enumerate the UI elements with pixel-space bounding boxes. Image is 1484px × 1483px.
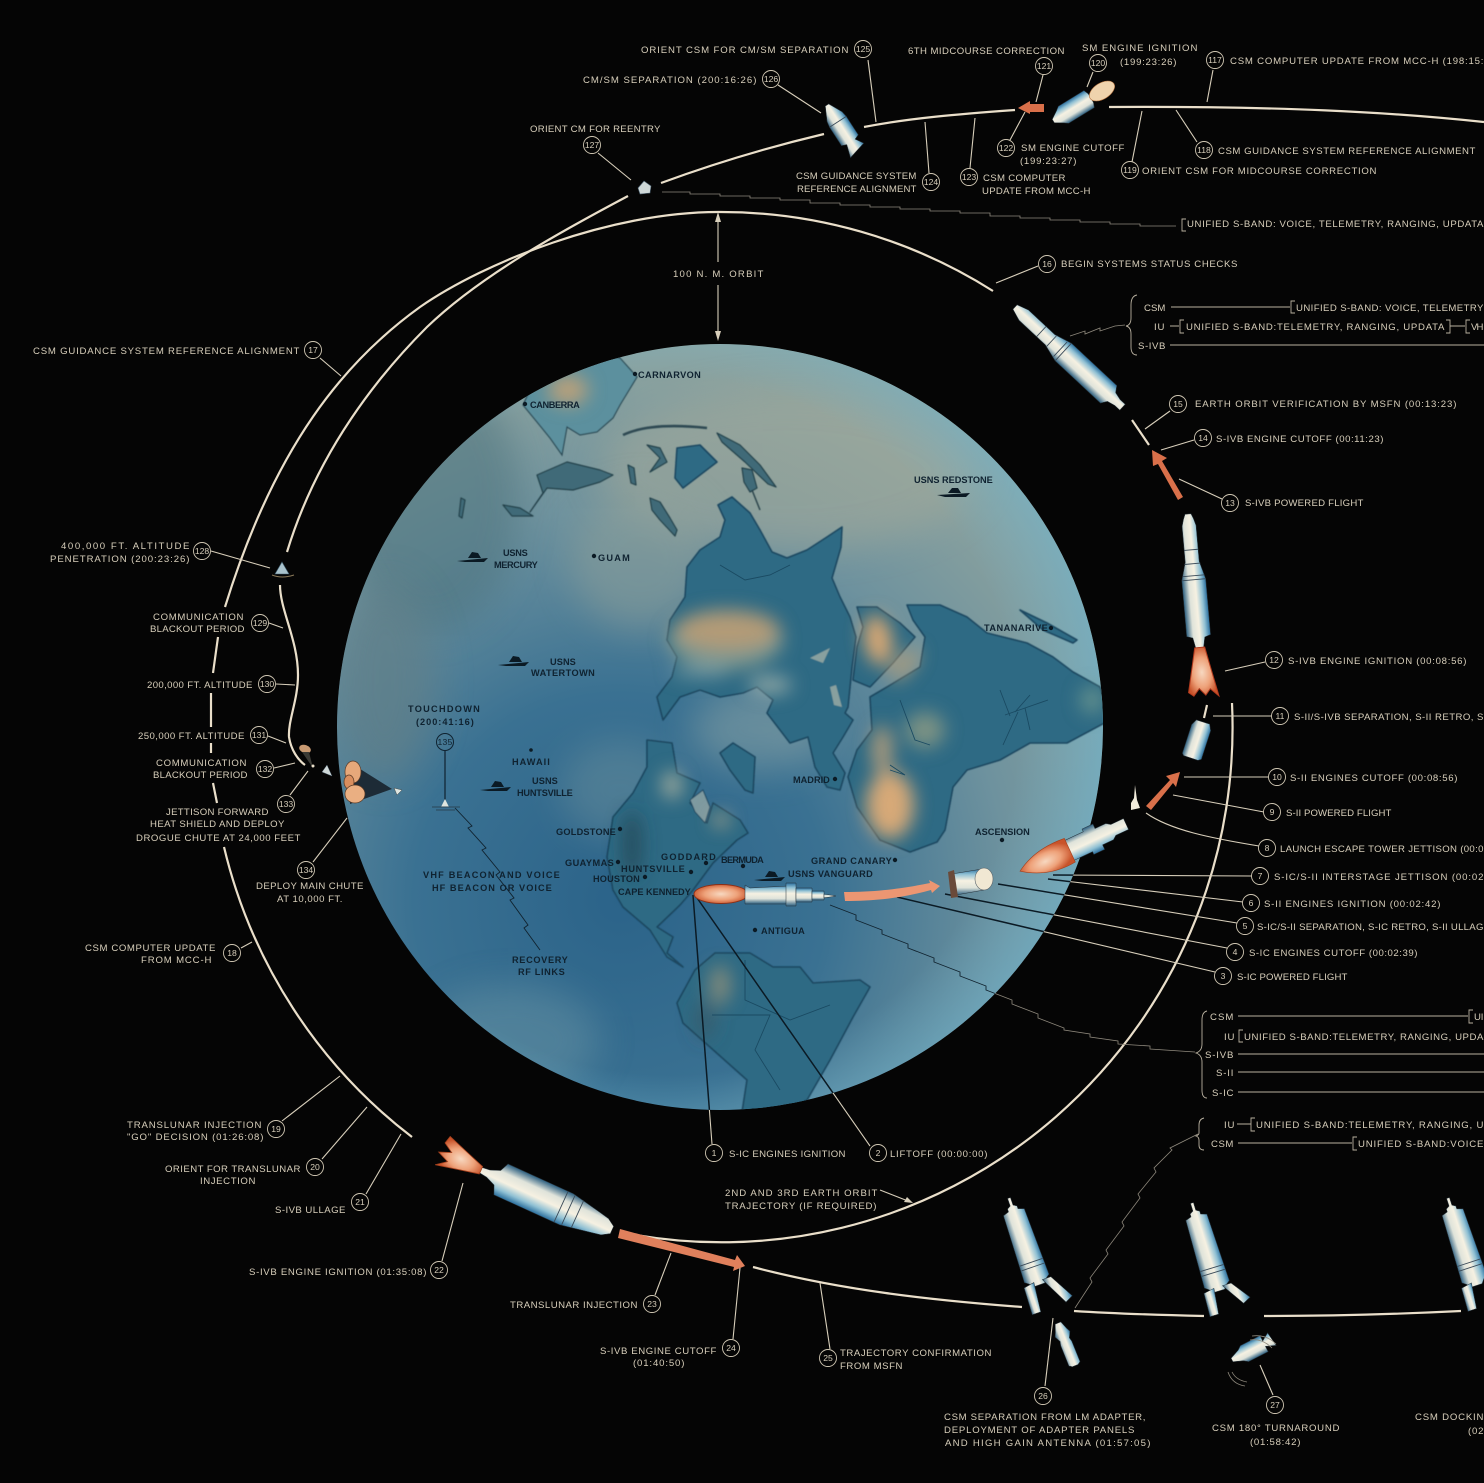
- callout 124: REFERENCE ALIGNMENT: [797, 184, 917, 195]
- terrain tinting: [548, 375, 1104, 1040]
- callout 121: [908, 46, 1065, 102]
- callout 18: FROM MCC-H: [141, 955, 212, 966]
- rocket: Saturn V at liftoff with S-IC flame: [694, 883, 836, 906]
- callout 124: CSM GUIDANCE SYSTEM: [796, 171, 917, 182]
- communication zigzag: launch to S-band (outside earth): [830, 905, 1195, 1052]
- tracking ship: USNS Mercury: [457, 548, 538, 570]
- callout 129: BLACKOUT PERIOD: [150, 624, 245, 635]
- tracking ship: USNS Vanguard: USNS VANGUARD: [788, 869, 873, 879]
- drogue chute and forward heat shield: [298, 743, 332, 776]
- callout 131: [138, 726, 286, 744]
- callout 17: [33, 342, 341, 376]
- callout 10: S-II ENGINES CUTOFF (00:08:56): [1290, 773, 1458, 784]
- callout 132: [153, 758, 295, 781]
- arrow: translunar injection: [618, 1229, 745, 1271]
- earth station labels: GUAYMAS: [565, 858, 614, 868]
- callout 130: 130: [260, 679, 274, 689]
- callout 129: [150, 612, 283, 635]
- callout 11: [1213, 708, 1484, 724]
- rocket: translunar injection S-IVB with flame: [432, 1135, 619, 1245]
- callout 26: 26: [1038, 1391, 1048, 1401]
- arrow: S-IC powered flight: [844, 880, 940, 901]
- communication panel: launch S-band links: CSM: [1210, 1012, 1234, 1023]
- callout 118: CSM GUIDANCE SYSTEM REFERENCE ALIGNMENT: [1218, 146, 1476, 157]
- spacecraft: service module engine burn: [1048, 77, 1118, 130]
- callout 4: S-IC ENGINES CUTOFF (00:02:39): [1249, 948, 1418, 959]
- callout 10: 10: [1272, 772, 1282, 782]
- callout 23: [510, 1253, 671, 1312]
- continent: Africa: [848, 605, 1110, 852]
- callout 26: CSM SEPARATION FROM LM ADAPTER,: [944, 1412, 1146, 1423]
- communication panel: CSM, IU, S-IVB links in earth orbit: [1070, 295, 1484, 355]
- communication panel: translunar S-band links: UNIFIED S-BAND:VOICE: [1358, 1139, 1484, 1150]
- callout 120: (199:23:26): [1120, 57, 1177, 68]
- callout 121: 6TH MIDCOURSE CORRECTION: [908, 46, 1065, 57]
- callout 125: 125: [856, 44, 870, 54]
- tracking ship: USNS Huntsville: USNS: [532, 776, 558, 786]
- arrow: S-IVB powered flight: [1152, 450, 1183, 500]
- callout 14: 14: [1198, 433, 1208, 443]
- callout 135: touchdown: [408, 704, 480, 810]
- rocket: S-II engines ignition, tilted stack: [1015, 811, 1132, 886]
- callout 3: 3: [1221, 971, 1226, 981]
- earth globe: [335, 344, 1110, 1125]
- communication panel: translunar S-band links: [1196, 1118, 1484, 1150]
- communication panel: launch S-band links: [1196, 1010, 1484, 1099]
- callout 21: 21: [355, 1197, 365, 1207]
- recovery RF links: RF LINKS: [518, 967, 565, 977]
- earth station labels: GOLDSTONE: [556, 827, 616, 837]
- callout 127: [530, 124, 661, 180]
- callout 21: S-IVB ULLAGE: [275, 1205, 346, 1216]
- callout: 2nd and 3rd earth orbit trajectory: 2ND AND 3RD EARTH ORBIT: [725, 1188, 878, 1199]
- callout 7: 7: [1258, 871, 1263, 881]
- callout 2: [695, 895, 988, 1162]
- callout 24: [600, 1268, 740, 1369]
- main parachutes with command module: [344, 761, 402, 804]
- callout 13: S-IVB POWERED FLIGHT: [1245, 498, 1364, 509]
- earth station labels: ANTIGUA: [761, 926, 805, 936]
- callout 17: CSM GUIDANCE SYSTEM REFERENCE ALIGNMENT: [33, 346, 300, 357]
- callout 122: [998, 112, 1125, 167]
- callout: 2nd and 3rd earth orbit trajectory: [725, 1188, 913, 1212]
- earth station labels: HUNTSVILLE: [621, 864, 685, 874]
- callout 118: 118: [1197, 145, 1211, 155]
- callout 124: 124: [924, 177, 938, 187]
- callout 9: S-II POWERED FLIGHT: [1286, 808, 1392, 819]
- callout: CSM docking: CSM DOCKIN: [1415, 1412, 1484, 1423]
- callout 6: S-II ENGINES IGNITION (00:02:42): [1264, 899, 1441, 910]
- continent: South America: [677, 953, 870, 1125]
- callout 7: S-IC/S-II INTERSTAGE JETTISON (00:02: [1274, 872, 1484, 883]
- tracking ship: USNS Watertown: USNS: [550, 657, 576, 667]
- callout 135: touchdown: 135: [438, 737, 452, 747]
- callout: CSM docking: [1415, 1412, 1484, 1437]
- callout 130: [147, 676, 295, 692]
- rivers: [712, 565, 1048, 1090]
- tracking ship: USNS Redstone: USNS REDSTONE: [914, 475, 993, 485]
- callout 20: 20: [310, 1162, 320, 1172]
- callout 133: DROGUE CHUTE AT 24,000 FEET: [136, 833, 301, 844]
- rocket: S-IVB powered, vertical with flame: [1173, 513, 1219, 699]
- callout 134: DEPLOY MAIN CHUTE: [256, 881, 364, 892]
- callout 5: S-IC/S-II SEPARATION, S-IC RETRO, S-II ULLAG: [1257, 922, 1484, 933]
- callout 119: ORIENT CSM FOR MIDCOURSE CORRECTION: [1142, 166, 1377, 177]
- communication panel: CSM, IU, S-IVB links in earth orbit: S-IVB: [1138, 341, 1166, 352]
- callout 11: S-II/S-IVB SEPARATION, S-II RETRO, S: [1294, 712, 1484, 723]
- return trajectory from moon and reentry: [280, 107, 1484, 765]
- callout 123: CSM COMPUTER: [983, 173, 1066, 184]
- callout 4: 4: [1233, 947, 1238, 957]
- callout 1: [693, 895, 846, 1162]
- callout 117: 117: [1208, 55, 1222, 65]
- callout 126: CM/SM SEPARATION (200:16:26): [583, 75, 757, 86]
- callout 133: HEAT SHIELD AND DEPLOY: [150, 819, 285, 830]
- callout 127: ORIENT CM FOR REENTRY: [530, 124, 661, 135]
- tracking ship: USNS Mercury: MERCURY: [494, 560, 538, 570]
- white dash: earth orbit insertion: [1132, 420, 1149, 445]
- callout 21: [275, 1134, 401, 1216]
- callout 134: 134: [299, 865, 313, 875]
- callout 119: [1122, 111, 1377, 178]
- continent: North America: [607, 740, 748, 967]
- recovery RF links: HF BEACON OR VOICE: [432, 883, 552, 893]
- continent: Australia: [523, 352, 637, 455]
- callout 135: touchdown: TOUCHDOWN: [408, 704, 480, 714]
- communication panel: CSM, IU, S-IVB links in earth orbit: IU: [1154, 322, 1165, 333]
- callout 133: [136, 771, 308, 844]
- earth station labels: GRAND CANARY: [811, 856, 892, 866]
- callout 26: DEPLOYMENT OF ADAPTER PANELS: [944, 1425, 1135, 1436]
- callout 128: 400,000 FT. ALTITUDE: [61, 541, 190, 552]
- callout 27: [1212, 1365, 1340, 1448]
- translunar coast trajectory: [753, 1267, 1461, 1316]
- callout 23: TRANSLUNAR INJECTION: [510, 1300, 638, 1311]
- communication panel: launch S-band links: S-IC: [1212, 1088, 1234, 1099]
- callout 126: [583, 70, 821, 113]
- callout 123: UPDATE FROM MCC-H: [982, 186, 1091, 197]
- callout 26: [944, 1318, 1151, 1449]
- callout 3: [897, 897, 1348, 984]
- communication panel: launch S-band links: S-II: [1216, 1068, 1234, 1079]
- earth station labels: TANANARIVE: [984, 623, 1048, 633]
- callout 18: CSM COMPUTER UPDATE: [85, 943, 216, 954]
- callout 119: 119: [1123, 165, 1137, 175]
- callout 1: S-IC ENGINES IGNITION: [729, 1149, 846, 1160]
- recovery RF links: VHF BEACON AND VOICE: [423, 870, 560, 880]
- callout 24: (01:40:50): [633, 1358, 685, 1369]
- communication panel: launch S-band links: UI: [1474, 1012, 1484, 1023]
- callout 133: JETTISON FORWARD: [166, 807, 269, 818]
- callout 8: [1146, 813, 1484, 856]
- callout 5: 5: [1243, 921, 1248, 931]
- callout 117: [1206, 52, 1484, 102]
- callout 128: PENETRATION (200:23:26): [50, 554, 190, 565]
- island: Madagascar: [1020, 610, 1077, 643]
- callout 125: ORIENT CSM FOR CM/SM SEPARATION: [641, 45, 849, 56]
- callout 12: 12: [1269, 655, 1279, 665]
- recovery RF links: RECOVERY: [512, 955, 568, 965]
- island: Greenland: [720, 743, 755, 793]
- spacecraft: docking view, cut by page edge: [1433, 1194, 1484, 1311]
- tracking ship: USNS Vanguard: [754, 869, 873, 881]
- spacecraft: CSM before CM/SM separation: [819, 100, 866, 158]
- callout 15: EARTH ORBIT VERIFICATION BY MSFN (00:13:23): [1195, 399, 1457, 410]
- callout 117: CSM COMPUTER UPDATE FROM MCC-H (198:15:: [1230, 56, 1484, 67]
- callout 122: 122: [999, 143, 1013, 153]
- callout 15: 15: [1173, 399, 1183, 409]
- tracking ship: USNS Huntsville: HUNTSVILLE: [517, 788, 573, 798]
- communication panel: CSM, IU, S-IVB links in earth orbit: CSM: [1144, 303, 1166, 314]
- callout 10: [1184, 768, 1458, 786]
- callout 126: 126: [764, 74, 778, 84]
- communication panel: launch S-band links: S-IVB: [1205, 1050, 1234, 1061]
- callout 20: INJECTION: [200, 1176, 256, 1187]
- callout 18: [85, 942, 252, 966]
- earth station labels: CAPE KENNEDY: [618, 887, 691, 897]
- white dash near S-II separation: [1204, 705, 1207, 718]
- heading: 100 nautical mile orbit marker: [673, 212, 764, 341]
- tracking ship: USNS Redstone: [914, 475, 993, 497]
- callout 26: AND HIGH GAIN ANTENNA (01:57:05): [945, 1438, 1151, 1449]
- callout 13: 13: [1225, 498, 1235, 508]
- callout 120: 120: [1091, 58, 1105, 68]
- callout 130: 200,000 FT. ALTITUDE: [147, 680, 253, 691]
- earth station labels: [512, 370, 1053, 936]
- recovery RF links: [423, 808, 568, 977]
- callout 18: 18: [227, 948, 237, 958]
- callout 14: [1161, 430, 1384, 450]
- callout 132: COMMUNICATION: [156, 758, 247, 769]
- callout 24: 24: [726, 1343, 736, 1353]
- communication zigzag: reentry to S-band: [662, 192, 1176, 226]
- callout 122: (199:23:27): [1020, 156, 1077, 167]
- callout 23: 23: [647, 1299, 657, 1309]
- Pacific islands: [459, 426, 776, 536]
- escape tower jettisoned: [1131, 785, 1140, 810]
- callout 122: SM ENGINE CUTOFF: [1021, 143, 1125, 154]
- callout 131: 131: [252, 730, 266, 740]
- callout 19: TRANSLUNAR INJECTION: [127, 1120, 262, 1131]
- earth station labels: HOUSTON: [593, 874, 640, 884]
- tracking ship: USNS Watertown: WATERTOWN: [531, 668, 595, 678]
- callout 132: 132: [258, 764, 272, 774]
- tracking ship: USNS Huntsville: [480, 776, 573, 798]
- callout 17: 17: [308, 345, 318, 355]
- spacecraft: adapter panels opening, first view: [994, 1189, 1074, 1315]
- callout 127: 127: [585, 140, 599, 150]
- earth station labels: HAWAII: [512, 757, 550, 767]
- continent: Arabia: [853, 607, 915, 687]
- callout 3: S-IC POWERED FLIGHT: [1237, 972, 1348, 983]
- callout 14: S-IVB ENGINE CUTOFF (00:11:23): [1216, 434, 1384, 445]
- callout 24: S-IVB ENGINE CUTOFF: [600, 1346, 717, 1357]
- callout 123: 123: [962, 172, 976, 182]
- callout 25: [820, 1283, 992, 1372]
- callout 11: 11: [1276, 711, 1285, 721]
- callout 2: 2: [876, 1148, 881, 1158]
- communication panel: translunar S-band links: IU: [1224, 1120, 1235, 1131]
- communication panel: CSM, IU, S-IVB links in earth orbit: UNIFIED S-BAND:TELEMETRY, RANGING, UPDATA: [1186, 322, 1445, 333]
- earth station labels: ASCENSION: [975, 827, 1030, 837]
- earth parking orbit lines: [211, 212, 1233, 1242]
- callout 19: 19: [271, 1124, 281, 1134]
- callout 9: [1173, 795, 1392, 820]
- callout: CSM docking: (02: [1468, 1426, 1484, 1437]
- callout 121: 121: [1037, 61, 1051, 71]
- earth station labels: BERMUDA: [721, 855, 764, 865]
- callout leaders over earth (dark portions): [692, 874, 1074, 1110]
- callout 16: [996, 256, 1238, 283]
- callout 125: [641, 40, 876, 122]
- callout 8: 8: [1265, 843, 1270, 853]
- callout 27: 27: [1270, 1400, 1280, 1410]
- communication panel: translunar S-band links: CSM: [1211, 1139, 1234, 1150]
- rocket: S-IVB and CSM in earth orbit: [1007, 298, 1131, 416]
- arrow: service module burn: [1018, 101, 1044, 114]
- callout 134: AT 10,000 FT.: [277, 894, 343, 905]
- callout 25: TRAJECTORY CONFIRMATION: [840, 1348, 992, 1359]
- callout 27: (01:58:42): [1250, 1437, 1301, 1448]
- callout 120: SM ENGINE IGNITION: [1082, 43, 1198, 54]
- Hudson Bay: [690, 790, 710, 823]
- callout 128: [50, 541, 270, 568]
- communication link: unified S-band top: UNIFIED S-BAND: VOICE, TELEMETRY, RANGING, UPDATA: [1187, 219, 1484, 230]
- callout 20: ORIENT FOR TRANSLUNAR: [165, 1164, 301, 1175]
- callout 124: [796, 122, 940, 195]
- callout 20: [165, 1107, 367, 1187]
- callout 1: 1: [712, 1148, 717, 1158]
- communication panel: translunar S-band links: UNIFIED S-BAND:TELEMETRY, RANGING, U: [1256, 1120, 1484, 1131]
- tracking ship: USNS Watertown: [498, 656, 595, 678]
- communication panel: CSM, IU, S-IVB links in earth orbit: VH: [1471, 322, 1484, 333]
- earth station labels: CARNARVON: [638, 370, 701, 380]
- spacecraft: CSM turnaround with motion arcs: [1228, 1331, 1277, 1386]
- callout 22: 22: [434, 1265, 444, 1275]
- callout 133: 133: [279, 799, 293, 809]
- callout 25: FROM MSFN: [840, 1361, 903, 1372]
- communication panel: CSM, IU, S-IVB links in earth orbit: UNIFIED S-BAND: VOICE, TELEMETRY: [1296, 303, 1484, 314]
- callout 5: [998, 884, 1484, 934]
- callout 128: 128: [195, 546, 209, 556]
- callout 22: [249, 1183, 463, 1278]
- earth station labels: GODDARD: [661, 852, 716, 862]
- callout 132: BLACKOUT PERIOD: [153, 770, 248, 781]
- communication panel: launch S-band links: UNIFIED S-BAND:TELEMETRY, RANGING, UPDA: [1244, 1032, 1484, 1043]
- callout 6: 6: [1249, 898, 1254, 908]
- callout 19: [127, 1076, 340, 1143]
- spacecraft: adapter panels opening, second view: [1177, 1195, 1252, 1317]
- callout 25: 25: [823, 1353, 833, 1363]
- callout 129: 129: [253, 618, 267, 628]
- callout 19: "GO" DECISION (01:26:08): [127, 1132, 264, 1143]
- callout 129: COMMUNICATION: [153, 612, 244, 623]
- inner seas: [810, 648, 842, 707]
- spacecraft: command module at 400,000 ft: [272, 562, 294, 577]
- callout 120: [1082, 43, 1198, 87]
- tracking ship: USNS Mercury: USNS: [503, 548, 528, 558]
- callout 16: BEGIN SYSTEMS STATUS CHECKS: [1061, 259, 1238, 270]
- spacecraft: command module at reentry orientation: [638, 181, 651, 194]
- callout 6: [1048, 879, 1441, 912]
- callout 27: CSM 180° TURNAROUND: [1212, 1423, 1340, 1434]
- callout 4: [945, 894, 1418, 960]
- callout 16: 16: [1042, 259, 1052, 269]
- callout 12: [1225, 652, 1467, 671]
- earth station labels: CANBERRA: [530, 400, 580, 410]
- communication panel: launch S-band links: IU: [1224, 1032, 1235, 1043]
- spent S-II stage: [1182, 719, 1213, 761]
- callout 9: 9: [1270, 807, 1275, 817]
- callout 135: touchdown: (200:41:16): [416, 717, 474, 727]
- callout 131: 250,000 FT. ALTITUDE: [138, 731, 245, 742]
- continent: Eurasia: [657, 497, 856, 790]
- callout 22: S-IVB ENGINE IGNITION (01:35:08): [249, 1267, 427, 1278]
- callout 8: LAUNCH ESCAPE TOWER JETTISON (00:0: [1280, 844, 1484, 855]
- callout 118: [1176, 110, 1476, 158]
- spent S-IC stage: [948, 868, 993, 898]
- callout 13: [1179, 479, 1364, 512]
- callout 12: S-IVB ENGINE IGNITION (00:08:56): [1288, 656, 1467, 667]
- callout: 2nd and 3rd earth orbit trajectory: TRAJECTORY (IF REQUIRED): [725, 1201, 877, 1212]
- earth station labels: GUAM: [598, 553, 630, 563]
- callout 15: [1145, 396, 1457, 429]
- spacecraft: CSM separated from LM adapter: [1051, 1320, 1083, 1369]
- callout 123: [960, 118, 1091, 197]
- ocean tonal patches: [335, 370, 980, 1095]
- arrow: S-II powered flight: [1146, 772, 1180, 810]
- callout 7: [1053, 868, 1484, 884]
- heading: 100 nautical mile orbit marker: 100 N. M. ORBIT: [673, 269, 764, 280]
- callout 134: [256, 818, 364, 905]
- communication zigzag: coast phase to S-band: [1075, 1134, 1198, 1308]
- callout 2: LIFTOFF (00:00:00): [890, 1149, 988, 1160]
- earth station labels: MADRID: [793, 775, 830, 785]
